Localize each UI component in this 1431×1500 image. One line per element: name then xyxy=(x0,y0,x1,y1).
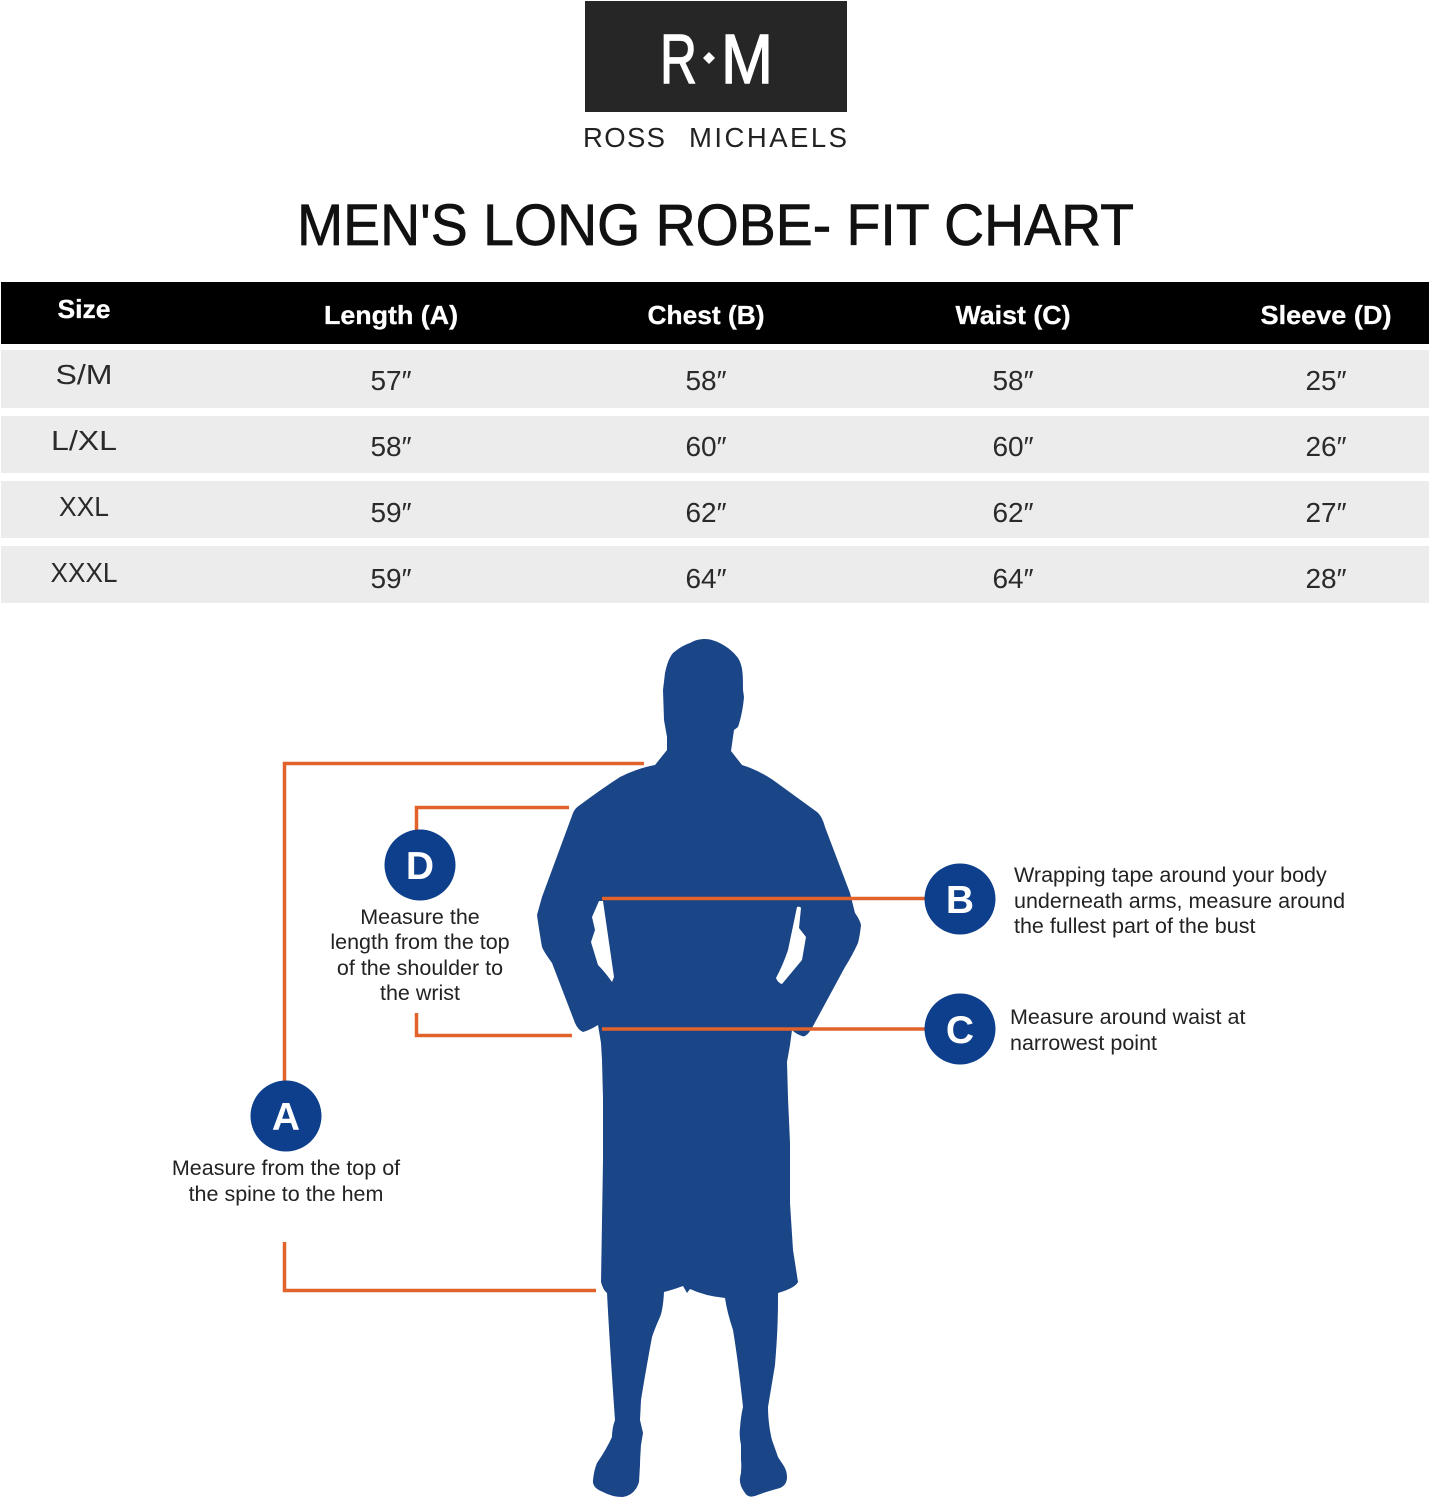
row XXXL: 64″ xyxy=(685,563,727,594)
badge C xyxy=(924,994,996,1064)
badge D xyxy=(384,830,456,900)
badge B xyxy=(924,864,996,934)
row XXL: 27″ xyxy=(1305,497,1347,528)
row XXXL xyxy=(1,546,1429,603)
table header: Size xyxy=(58,294,110,324)
logo: MICHAELS xyxy=(689,122,847,153)
row XXXL: XXXL xyxy=(50,557,118,588)
logo: R xyxy=(660,20,697,98)
badge A xyxy=(250,1080,322,1152)
text D: the wrist xyxy=(380,981,460,1005)
text D: Measure the xyxy=(360,905,480,929)
measure line B xyxy=(602,897,926,900)
title: MEN'S LONG ROBE- FIT CHART xyxy=(297,193,1134,258)
row S/M: 58″ xyxy=(992,365,1034,396)
text A xyxy=(172,1156,400,1206)
row XXL xyxy=(1,481,1429,538)
measure line D xyxy=(416,808,572,1036)
text B: the fullest part of the bust xyxy=(1014,914,1255,938)
text C: narrowest point xyxy=(1010,1031,1157,1055)
badge B: B xyxy=(946,879,974,922)
text D xyxy=(330,905,510,1005)
callout C xyxy=(924,994,1245,1064)
callout D xyxy=(330,830,510,1005)
row XXL: 62″ xyxy=(992,497,1034,528)
measure line C xyxy=(602,1027,926,1031)
row XXL: 59″ xyxy=(370,497,412,528)
row XXL: XXL xyxy=(59,491,109,522)
row XXL: 62″ xyxy=(685,497,727,528)
callout B xyxy=(924,863,1345,938)
table header: Chest (B) xyxy=(648,300,764,330)
row L/XL: L/XL xyxy=(51,425,117,456)
body silhouette xyxy=(537,639,861,1497)
row S/M: 25″ xyxy=(1305,365,1347,396)
badge D: D xyxy=(406,845,434,888)
row S/M: S/M xyxy=(56,359,112,390)
table header: Length (A) xyxy=(324,300,458,330)
row XXXL: 59″ xyxy=(370,563,412,594)
text D: length from the top xyxy=(330,930,510,954)
text A: the spine to the hem xyxy=(189,1182,383,1206)
callout A xyxy=(172,1080,400,1206)
logo: M xyxy=(721,20,773,98)
row L/XL: 26″ xyxy=(1305,431,1347,462)
text B: Wrapping tape around your body xyxy=(1014,863,1327,887)
logo: ROSS xyxy=(583,122,665,153)
row L/XL xyxy=(1,416,1429,473)
row S/M: 58″ xyxy=(685,365,727,396)
table header: Sleeve (D) xyxy=(1260,300,1392,330)
text D: of the shoulder to xyxy=(337,956,503,980)
table header: Waist (C) xyxy=(956,300,1070,330)
row L/XL: 58″ xyxy=(370,431,412,462)
text C xyxy=(1010,1005,1245,1055)
row XXXL: 64″ xyxy=(992,563,1034,594)
measure line A xyxy=(284,764,644,1290)
row L/XL: 60″ xyxy=(685,431,727,462)
text B: underneath arms, measure around xyxy=(1014,889,1345,913)
logo xyxy=(583,1,847,153)
badge C: C xyxy=(946,1009,974,1052)
size table xyxy=(1,282,1429,603)
row S/M: 57″ xyxy=(370,365,412,396)
badge A: A xyxy=(272,1096,300,1139)
row L/XL: 60″ xyxy=(992,431,1034,462)
text B xyxy=(1014,863,1345,938)
text C: Measure around waist at xyxy=(1010,1005,1245,1029)
table header xyxy=(1,282,1429,344)
row S/M xyxy=(1,350,1429,408)
row XXXL: 28″ xyxy=(1305,563,1347,594)
text A: Measure from the top of xyxy=(172,1156,400,1180)
